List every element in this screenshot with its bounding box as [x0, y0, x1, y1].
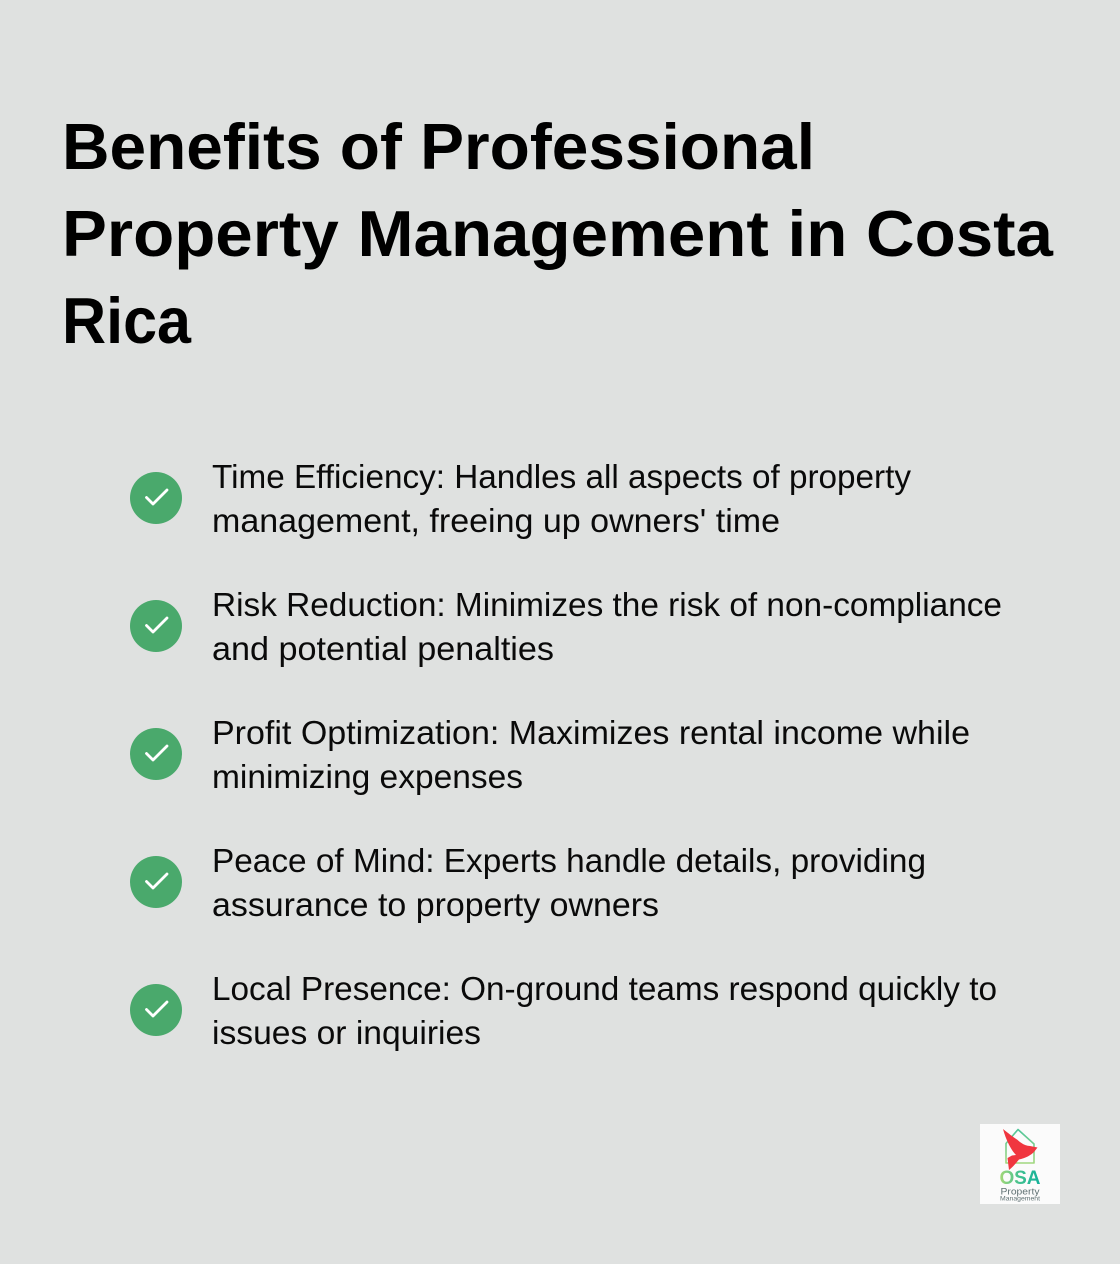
title: Property Management in Costa: [62, 197, 1054, 270]
item: peace of mind: assurance to property owners: [212, 886, 659, 923]
logo: OSA Property Management: OSA: [1000, 1168, 1041, 1189]
item: profit optimization: minimizing expenses: [212, 758, 523, 795]
item: local presence: [130, 970, 997, 1051]
item: local presence: Local Presence: On-ground teams respond quickly to: [212, 970, 997, 1007]
item: time efficiency: management, freeing up owners' time: [212, 502, 780, 539]
icon: red bird: [1003, 1129, 1038, 1170]
title: [62, 110, 1054, 357]
item: peace of mind: [130, 842, 926, 923]
icon: house outline: [1006, 1130, 1034, 1163]
title: Benefits of Professional: [62, 110, 815, 183]
logo: OSA Property Management: Management: [1000, 1196, 1040, 1202]
item: risk reduction: and potential penalties: [212, 630, 554, 667]
list of benefits: [130, 458, 1002, 1051]
item: peace of mind: Peace of Mind: Experts handle details, providing: [212, 842, 926, 879]
item: risk reduction: [130, 586, 1002, 667]
item: time efficiency: [130, 458, 911, 539]
item: time efficiency: Time Efficiency: Handles all aspects of property: [212, 458, 911, 495]
item: local presence: issues or inquiries: [212, 1014, 481, 1051]
item: profit optimization: [130, 714, 970, 795]
logo: OSA Property Management: [980, 1124, 1060, 1204]
title: Rica: [62, 284, 192, 357]
item: risk reduction: Risk Reduction: Minimizes the risk of non-compliance: [212, 586, 1002, 623]
logo: OSA Property Management: Property: [1000, 1186, 1040, 1198]
item: profit optimization: Profit Optimization: Maximizes rental income while: [212, 714, 970, 751]
